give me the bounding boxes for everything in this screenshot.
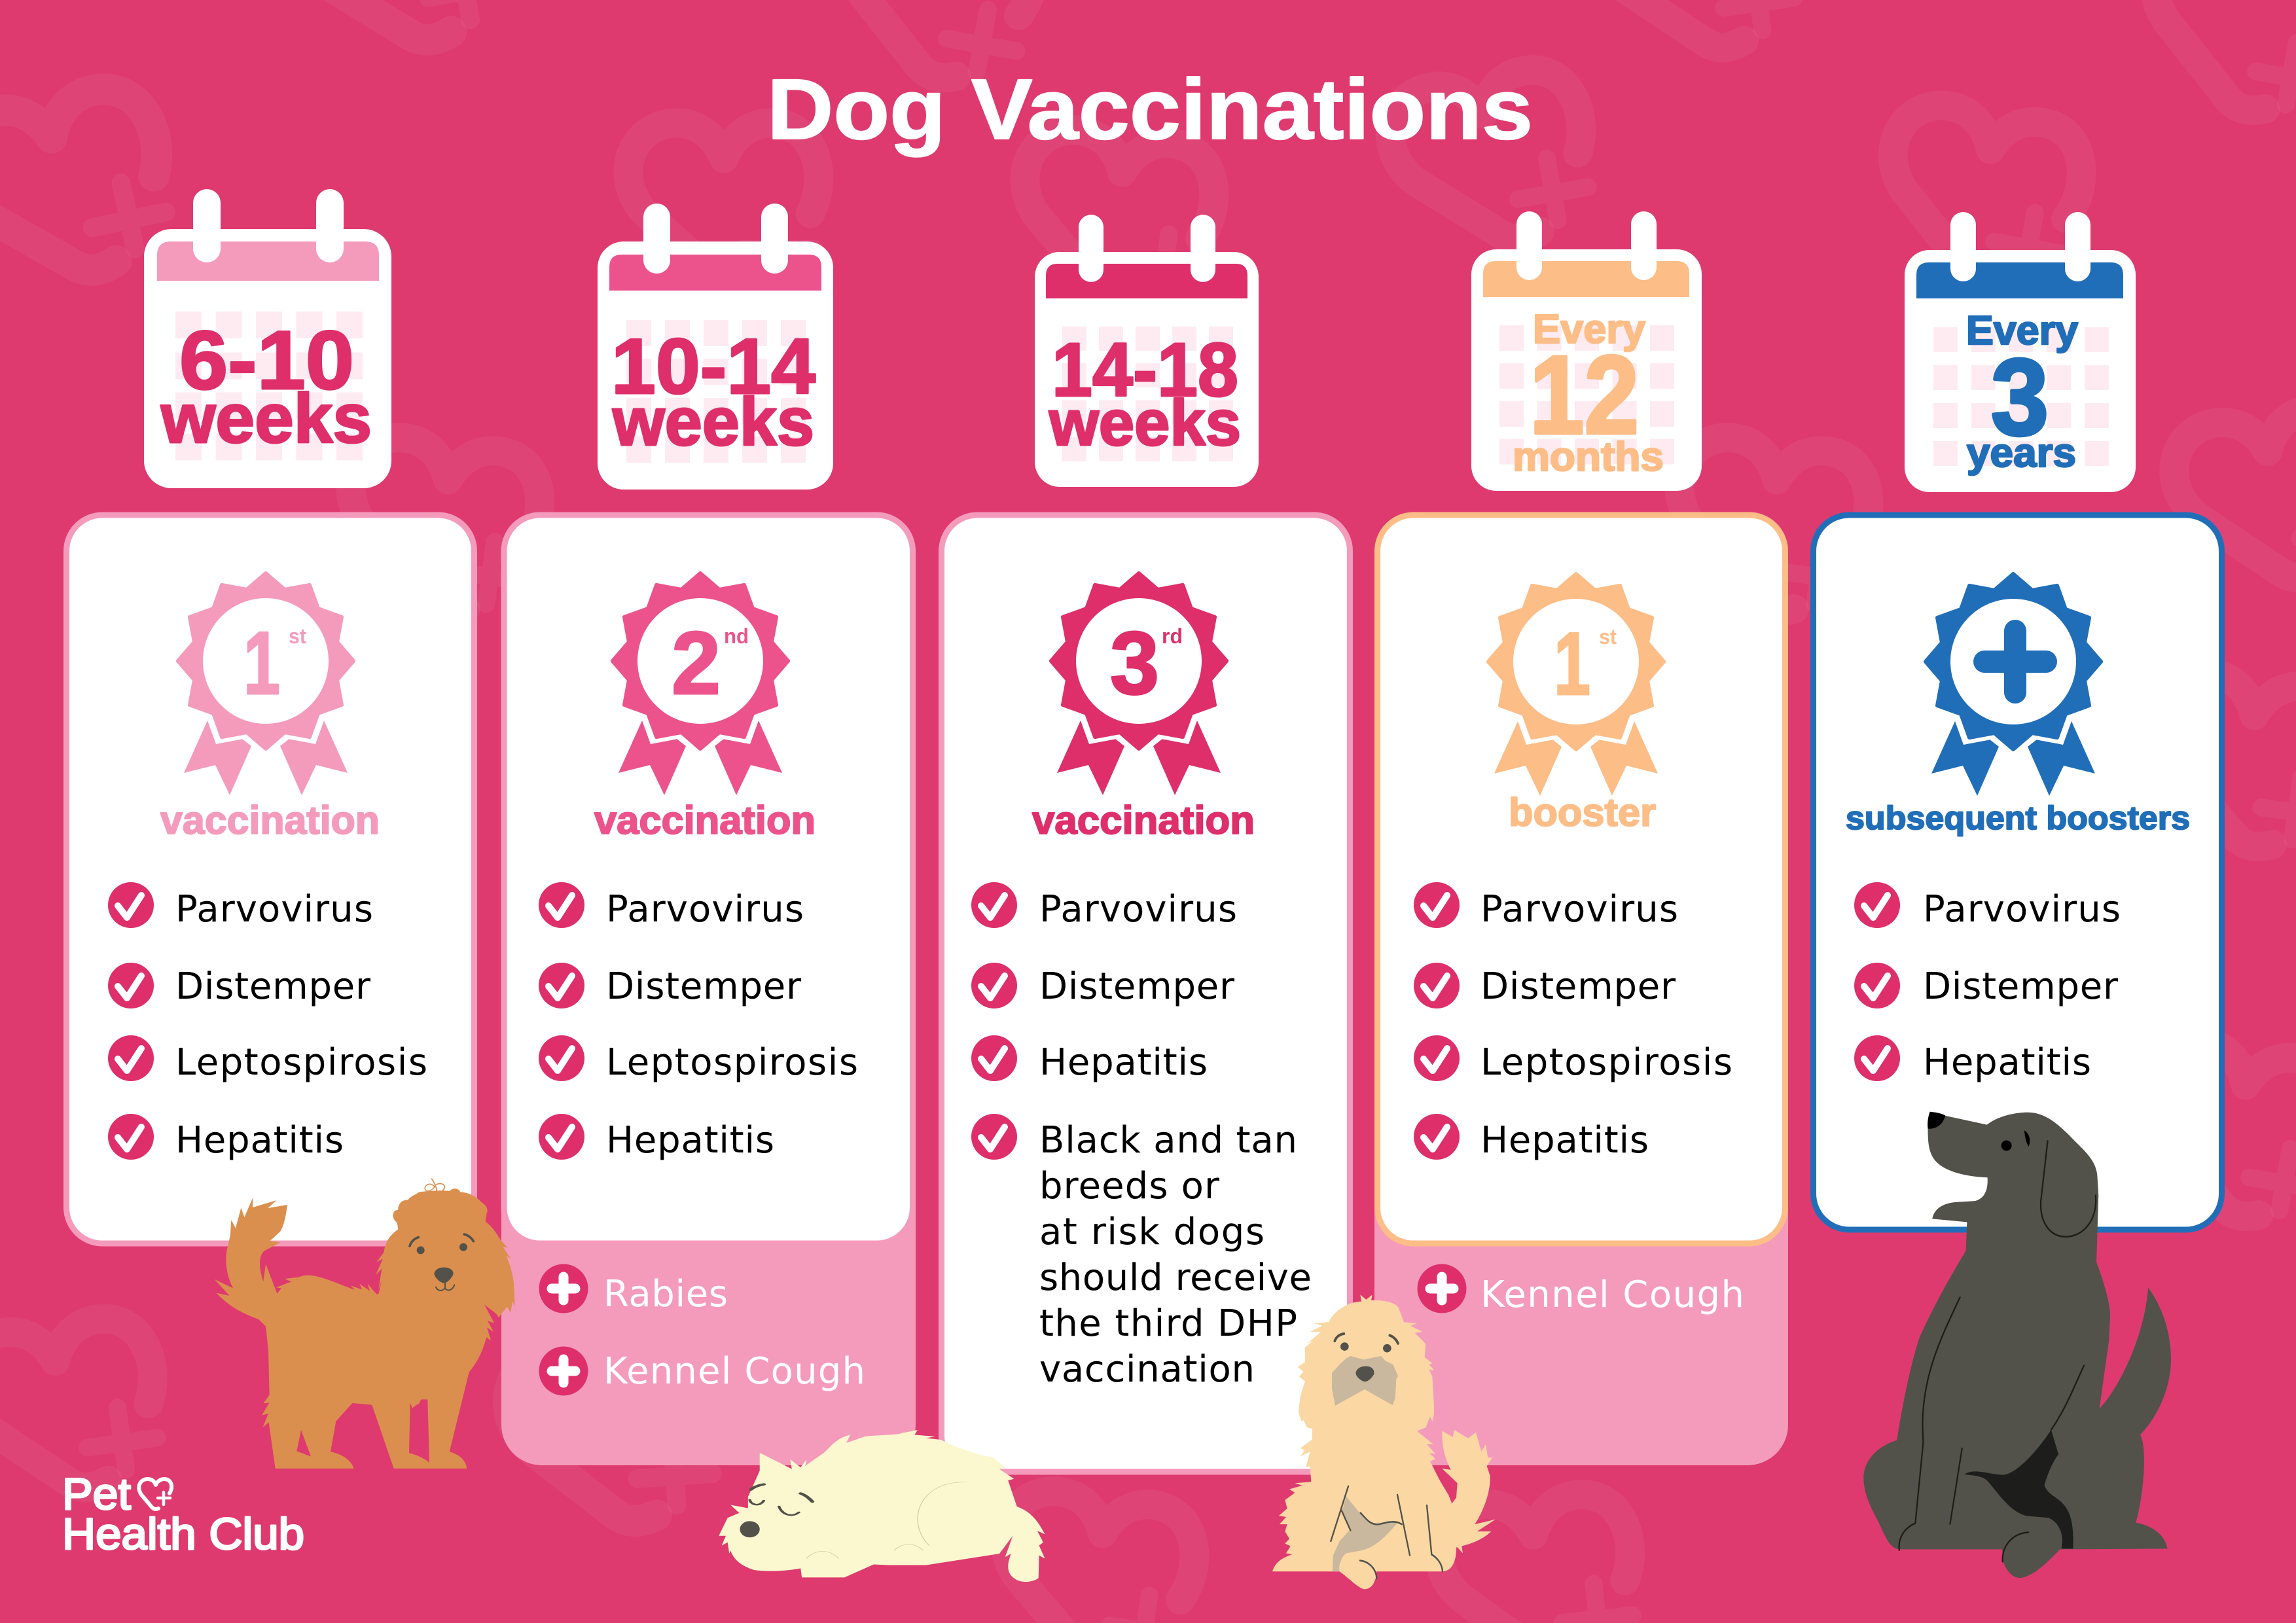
rosette: 1st: 1 xyxy=(243,613,280,713)
card xyxy=(504,515,912,1243)
rosette: 3rd: 3 xyxy=(1110,613,1159,713)
rosette: 3rd xyxy=(1051,573,1227,795)
rosette: 2nd: 2 xyxy=(672,613,721,713)
illustration: cream sleeping dog xyxy=(719,1430,1045,1582)
checklist: Black and tan xyxy=(1039,1119,1297,1162)
rosette: 1st booster xyxy=(1488,574,1664,796)
icon: heart with plus xyxy=(139,1479,171,1509)
illustration: tan sitting dog xyxy=(1272,1294,1496,1589)
checklist xyxy=(971,882,1312,1391)
extras list: Rabies xyxy=(603,1273,728,1315)
extras list xyxy=(1418,1264,1744,1316)
card xyxy=(1377,515,1785,1243)
calendar: every 12 months: 12 xyxy=(1530,333,1639,457)
card xyxy=(941,515,1350,1472)
checklist: Hepatitis xyxy=(1039,1041,1208,1084)
label: vaccination xyxy=(160,798,380,842)
label: subsequent boosters xyxy=(1846,800,2190,836)
panel: 3rd vaccination xyxy=(941,515,1350,1472)
checklist: Distemper xyxy=(1923,965,2119,1008)
checklist: Parvovirus xyxy=(1039,888,1237,931)
calendar: every 12 months: Every xyxy=(1533,307,1646,352)
checklist: vaccination xyxy=(1039,1348,1255,1391)
panel: 1st booster xyxy=(1374,515,1788,1465)
label: booster xyxy=(1509,791,1656,834)
calendar: 6-10 weeks: 6-10 xyxy=(179,313,354,406)
calendar: 10-14 weeks: weeks xyxy=(612,384,814,460)
checklist: Hepatitis xyxy=(606,1119,774,1162)
label: vaccination xyxy=(594,798,816,842)
rosette: 2nd xyxy=(613,573,788,795)
rosette: plus xyxy=(1926,574,2101,796)
calendar: 6-10 weeks xyxy=(144,189,391,488)
calendar: every 3 years: years xyxy=(1967,431,2076,476)
checklist xyxy=(1854,882,2121,1084)
rosette: 2nd: nd xyxy=(724,624,749,648)
card xyxy=(1813,515,2221,1230)
logo: Pet Health Club xyxy=(62,1469,304,1559)
checklist: Hepatitis xyxy=(1480,1119,1649,1162)
checklist xyxy=(108,882,427,1162)
illustration: dark grey dog xyxy=(1863,1112,2171,1578)
checklist: Distemper xyxy=(606,965,802,1008)
checklist: Leptospirosis xyxy=(1480,1041,1732,1084)
panel: 1st vaccination xyxy=(67,515,474,1243)
checklist: Parvovirus xyxy=(1923,888,2121,931)
rosette: 1st booster: 1 xyxy=(1554,614,1590,713)
calendar: 10-14 weeks: 10-14 xyxy=(611,323,816,410)
rosette: 1st booster: st xyxy=(1599,625,1617,649)
rosette: 1st: st xyxy=(289,624,306,648)
extras list xyxy=(539,1264,865,1395)
calendar: every 3 years: 3 xyxy=(1991,337,2049,458)
checklist: should receive xyxy=(1039,1257,1312,1299)
card xyxy=(67,515,474,1243)
checklist: Distemper xyxy=(1480,965,1676,1008)
title: Dog Vaccinations xyxy=(767,61,1533,157)
checklist: Leptospirosis xyxy=(606,1041,858,1084)
checklist: Parvovirus xyxy=(175,888,373,931)
calendar: every 12 months xyxy=(1471,211,1702,491)
calendar: every 3 years: Every xyxy=(1966,308,2079,353)
logo: Pet Health Club: Health Club xyxy=(62,1509,304,1559)
rosette: 1st xyxy=(178,573,353,795)
checklist: Hepatitis xyxy=(175,1119,344,1162)
checklist xyxy=(539,882,858,1162)
checklist: at risk dogs xyxy=(1039,1211,1265,1253)
checklist: Hepatitis xyxy=(1923,1041,2091,1084)
calendar: 14-18 weeks xyxy=(1035,215,1259,487)
checklist xyxy=(1414,882,1732,1162)
illustration: orange dog xyxy=(215,1179,515,1469)
checklist: Distemper xyxy=(175,965,371,1008)
panel: subsequent boosters xyxy=(1813,515,2221,1230)
extra vaccines block xyxy=(501,982,916,1465)
checklist: Parvovirus xyxy=(606,888,804,931)
calendar: 14-18 weeks: weeks xyxy=(1049,387,1241,459)
panel: 2nd vaccination xyxy=(501,515,916,1465)
extras list: Kennel Cough xyxy=(1480,1274,1744,1316)
checklist: breeds or xyxy=(1039,1165,1220,1207)
checklist: Distemper xyxy=(1039,965,1235,1008)
label: vaccination xyxy=(1032,798,1255,842)
checklist: the third DHP xyxy=(1039,1302,1297,1345)
extra vaccines block xyxy=(1374,982,1788,1465)
calendar: 6-10 weeks: weeks xyxy=(160,379,372,457)
calendar: every 12 months: months xyxy=(1513,435,1664,480)
calendar: 14-18 weeks: 14-18 xyxy=(1052,327,1238,412)
calendar: every 3 years xyxy=(1905,212,2136,492)
calendar: 10-14 weeks xyxy=(598,204,833,490)
rosette: 3rd: rd xyxy=(1162,624,1183,648)
extras list: Kennel Cough xyxy=(603,1350,865,1393)
checklist: Leptospirosis xyxy=(175,1041,427,1084)
checklist: Parvovirus xyxy=(1480,888,1678,931)
logo: Pet Health Club: Pet xyxy=(62,1469,131,1519)
